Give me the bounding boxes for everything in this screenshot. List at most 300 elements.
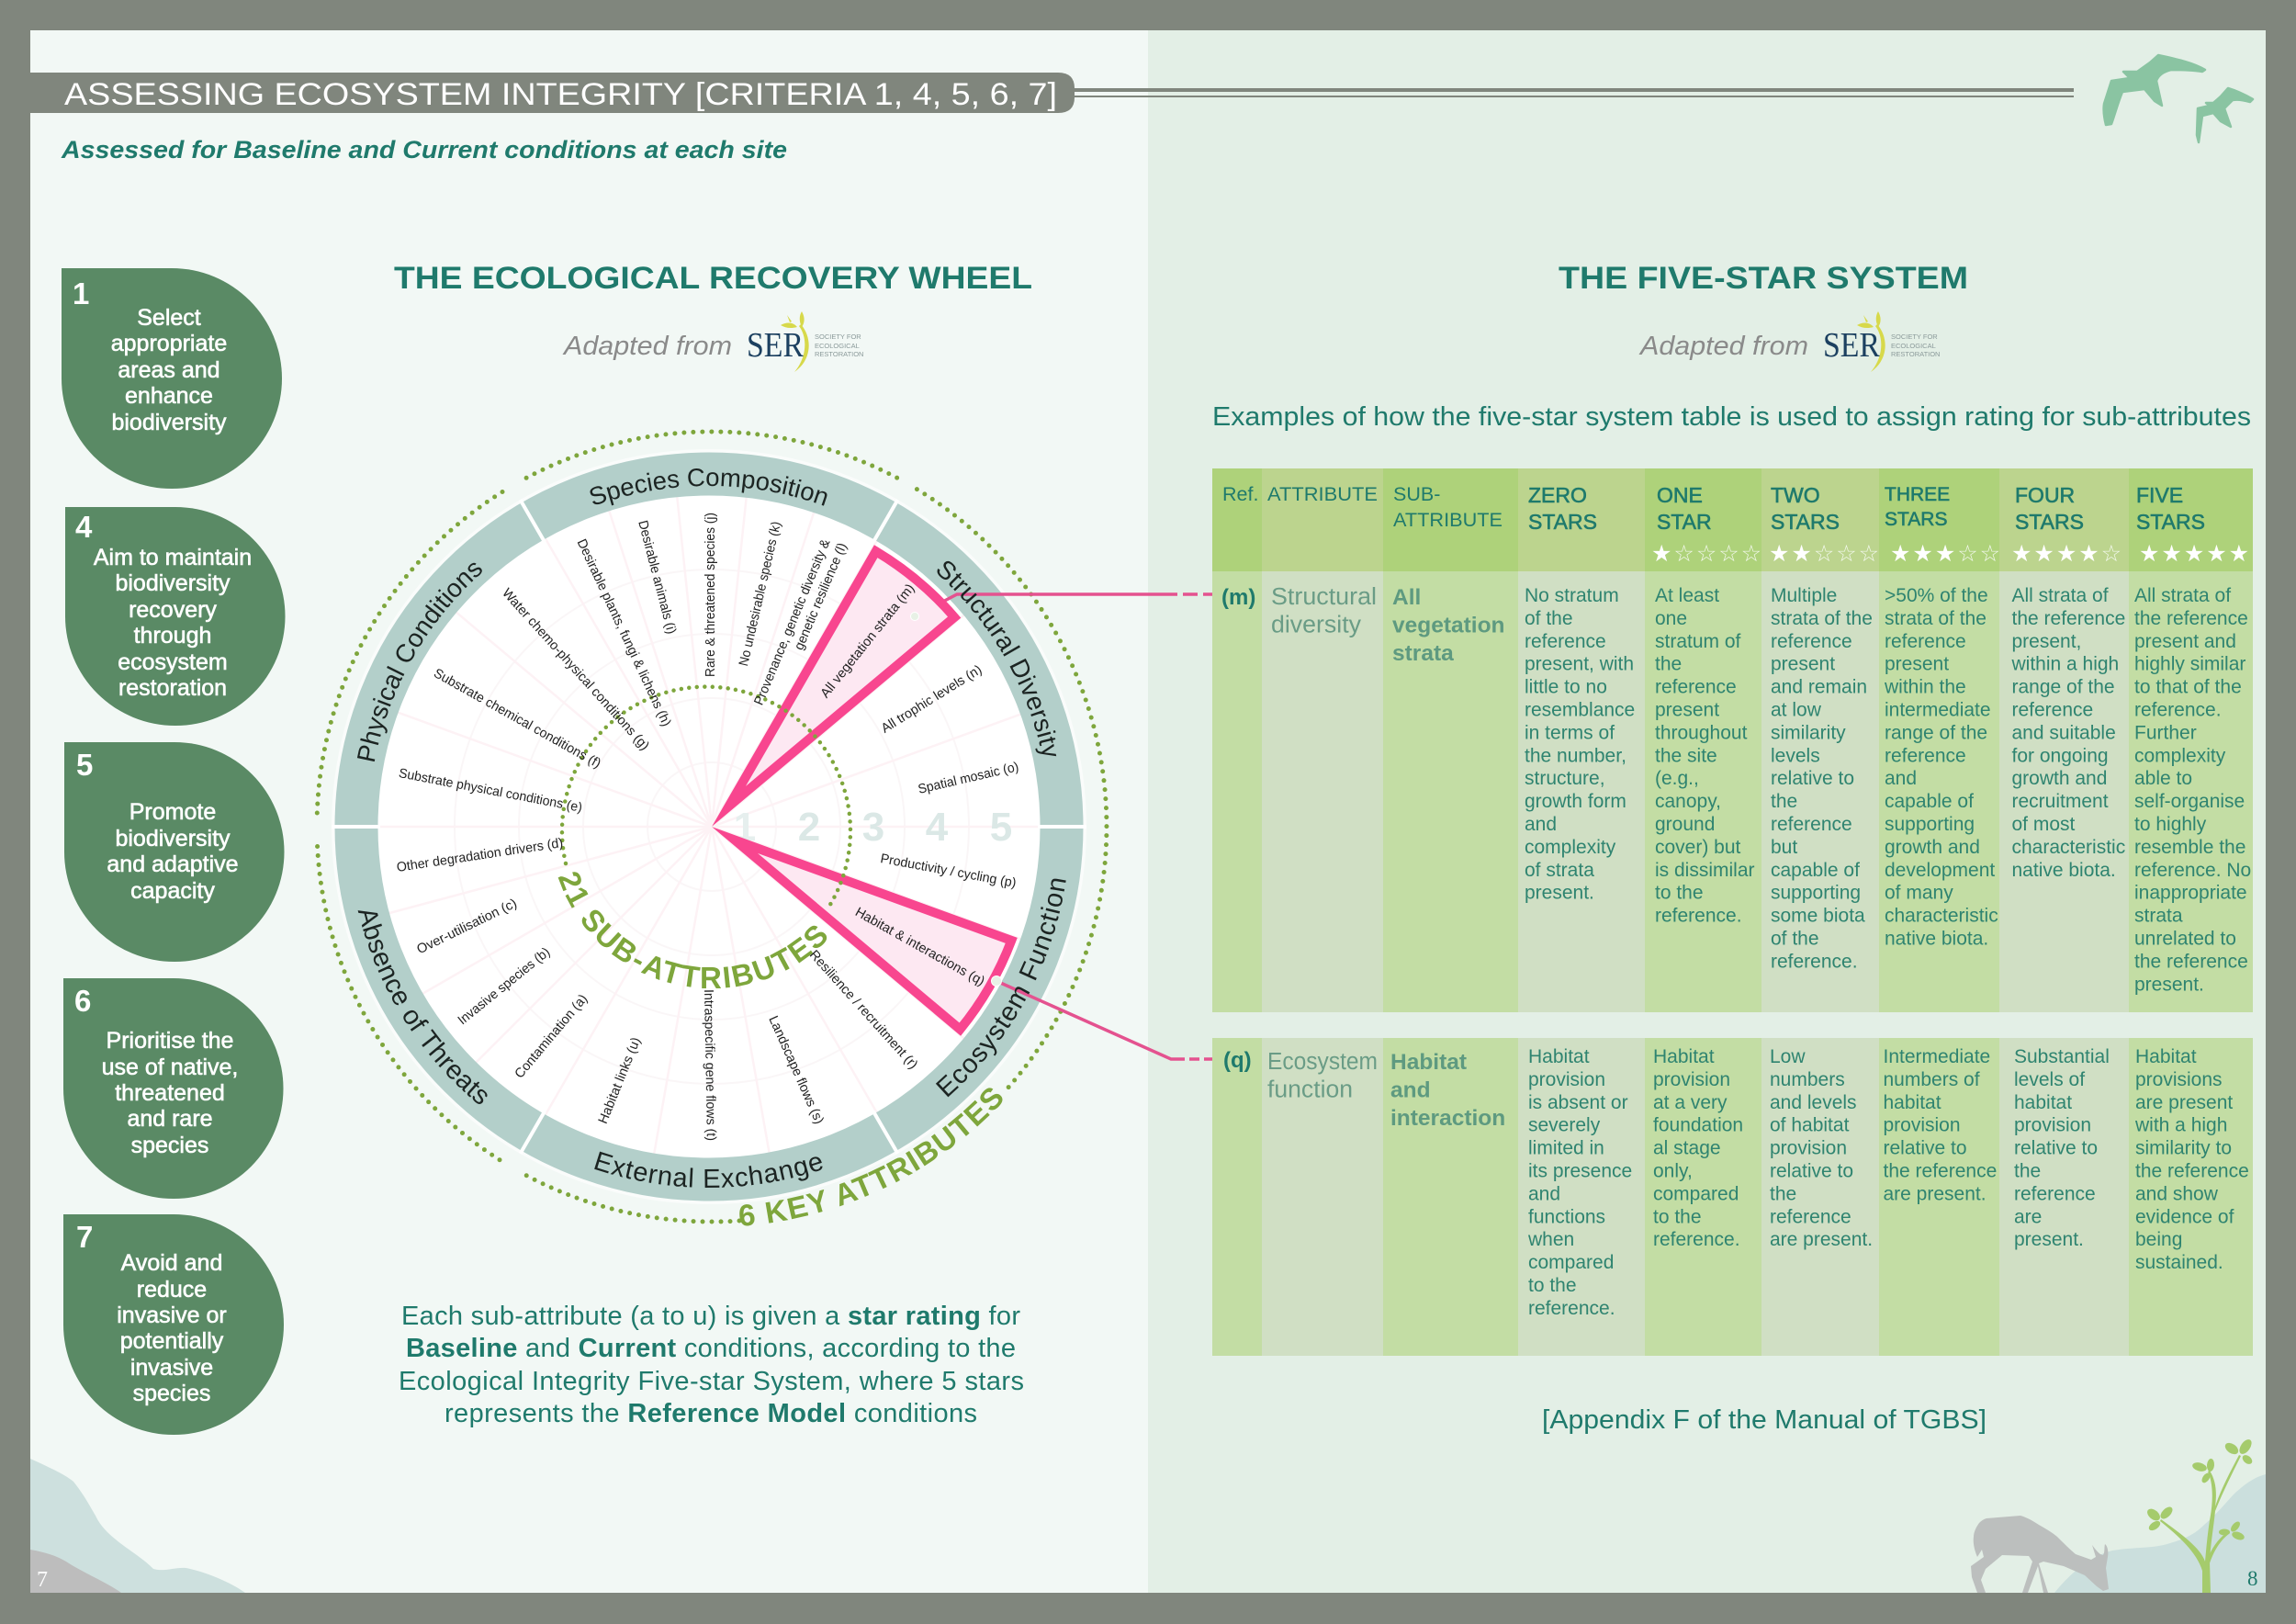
row m: two stars: strata of the [1771, 608, 1873, 629]
row m: three stars: growth and [1885, 837, 1980, 858]
sub-attribute labels: Contamination (a) [512, 992, 591, 1081]
row q: labels: and [1390, 1078, 1431, 1102]
row m: five stars: highly similar [2134, 654, 2245, 675]
row m: one star: (e.g., [1655, 768, 1699, 789]
row m: three stars: capable of [1885, 791, 1974, 812]
row q: five stars: with a high [2134, 1115, 2227, 1136]
row m: five stars: complexity [2134, 745, 2226, 766]
row q: labels: Habitat [1390, 1050, 1467, 1075]
table header labels: ATTRIBUTE [1267, 483, 1378, 505]
row q: two stars: numbers [1770, 1069, 1845, 1090]
heading: five-star system: THE FIVE-STAR SYSTEM [1559, 261, 1968, 296]
pill 7: reduce [137, 1277, 207, 1303]
row q: five stars: similarity to [2135, 1138, 2232, 1159]
scale numbers 1 to 5: 2 [798, 805, 820, 850]
row m: labels: All [1392, 585, 1421, 610]
row m: two stars: reference [1771, 814, 1852, 835]
row m: four stars: of most [2011, 814, 2076, 835]
row q: one star: al stage [1653, 1138, 1721, 1159]
row m: zero stars: No stratum [1525, 585, 1619, 606]
icon: flying birds [2104, 55, 2253, 142]
sub-attribute labels: Desirable plants, fungi & lichens (h) [574, 537, 673, 728]
row q: three stars: provision [1883, 1115, 1961, 1136]
row m: zero stars: in terms of [1525, 722, 1615, 743]
row background: m [1212, 571, 2253, 1012]
table header labels: Ref. [1222, 483, 1258, 505]
sub-attribute labels: Other degradation drivers (d) [396, 836, 564, 875]
row q: two stars: are present. [1770, 1229, 1873, 1250]
adapted from SER logo (left): Adapted from [562, 332, 732, 361]
row m: zero stars: growth form [1525, 791, 1626, 812]
row m: three stars: supporting [1885, 814, 1975, 835]
row m: three stars: native biota. [1885, 928, 1988, 950]
row m: zero stars: of strata [1525, 860, 1594, 881]
row q: one star: only, [1653, 1161, 1693, 1181]
decoration: left bottom hills [30, 1459, 245, 1593]
row m: one star: stratum of [1655, 631, 1741, 652]
pill 6: Prioritise the [107, 1028, 233, 1054]
row m: two stars: but [1771, 837, 1797, 858]
row m: four stars: growth and [2011, 768, 2107, 789]
sub-attribute labels: No undesirable species (k) [737, 520, 784, 668]
row q: zero stars: is absent or [1528, 1092, 1628, 1113]
row m: two stars: relative to [1771, 768, 1854, 789]
adapted from SER logo (left): RESTORATION [815, 350, 863, 358]
wheel explanation text [399, 1302, 1024, 1428]
row q: two stars: relative to [1770, 1161, 1853, 1181]
row q: two stars: reference [1770, 1206, 1851, 1227]
adapted from SER logo (left): SER [747, 326, 805, 365]
pill 7: invasive or [117, 1303, 227, 1328]
row m: zero stars: complexity [1525, 837, 1616, 858]
row m: one star: cover) but [1655, 837, 1741, 858]
row q: two stars: provision [1770, 1138, 1847, 1159]
panel: right page [1148, 30, 2266, 1593]
row m: zero stars: present, with [1525, 654, 1634, 675]
row q: one star: at a very [1653, 1092, 1728, 1113]
row m: one star: throughout [1655, 722, 1748, 743]
row m: zero stars: resemblance [1525, 700, 1635, 720]
white disk [332, 449, 1086, 1204]
row q: zero stars: when [1527, 1229, 1574, 1250]
row m: three stars: range of the [1885, 722, 1987, 743]
highlighted wedge: all vegetation strata [729, 551, 954, 806]
table header labels: ATTRIBUTE [1393, 509, 1503, 531]
attribute labels on ring: Absence of Threats [358, 910, 487, 1104]
row m: three stars: within the [1884, 677, 1966, 698]
row m: two stars: at low [1771, 700, 1822, 720]
pill 7 [63, 1214, 284, 1435]
row q: five stars: the reference [2135, 1161, 2249, 1181]
row m: three stars: strata of the [1885, 608, 1986, 629]
adapted from SER logo (right): RESTORATION [1891, 350, 1940, 358]
pill 6: and rare [127, 1106, 213, 1132]
label: 21 sub-attributes: 21 SUB-ATTRIBUTES [558, 872, 827, 988]
row m: labels [1221, 584, 1505, 666]
row m: two stars: reference [1771, 631, 1852, 652]
row background: q [1212, 1038, 2253, 1356]
pill 1: appropriate [111, 331, 227, 356]
table header labels [1222, 483, 2205, 534]
row m: five stars: reference. [2134, 700, 2222, 720]
row m: three stars: >50% of the [1885, 585, 1988, 606]
table header labels: STARS [1771, 510, 1840, 534]
row m: two stars: capable of [1771, 860, 1860, 881]
attribute labels on ring: Species Composition [590, 468, 827, 506]
scale numbers 1 to 5: 1 [734, 805, 756, 850]
row q: three stars: relative to [1883, 1138, 1967, 1159]
row m: two stars: some biota [1771, 906, 1865, 927]
connector dots [911, 612, 1001, 987]
row m: three stars: development [1885, 860, 1995, 881]
row q: zero stars: severely [1528, 1115, 1601, 1136]
pill 6: use of native, [102, 1054, 238, 1080]
pill 5: and adaptive [107, 851, 239, 877]
pill 5 [64, 742, 285, 962]
row q: labels: function [1267, 1077, 1353, 1102]
row m: four stars: within a high [2011, 654, 2119, 675]
row m: three stars: and [1885, 768, 1917, 789]
row m: five stars: to highly [2134, 814, 2207, 835]
row q: five stars: are present [2135, 1092, 2233, 1113]
row q: labels: Ecosystem [1267, 1049, 1378, 1075]
pill 5: capacity [130, 878, 215, 904]
table header labels: STAR [1657, 510, 1712, 534]
row q: zero stars: provision [1528, 1069, 1605, 1090]
row m: five stars: the reference [2134, 951, 2248, 972]
pill 4: 4 [75, 510, 93, 544]
sub-attribute labels: All trophic levels (n) [879, 662, 985, 737]
pill 5: 5 [76, 748, 93, 782]
pill 4: biodiversity [115, 570, 231, 596]
row q: two stars: the [1770, 1183, 1796, 1204]
row q: three stars: the reference [1883, 1161, 1997, 1181]
adapted from SER logo (right) [1638, 311, 1940, 372]
row q: labels: (q) [1223, 1048, 1252, 1073]
row m: two stars: levels [1771, 745, 1820, 766]
wheel explanation text: represents the Reference Model conditions [445, 1399, 977, 1428]
scale numbers 1 to 5 [734, 805, 1012, 850]
row m: five stars: reference. No [2134, 860, 2251, 881]
wheel explanation text: Each sub-attribute (a to u) is given a star rating for [401, 1302, 1020, 1331]
pill 4 [65, 507, 285, 726]
row m: labels: Structural [1271, 584, 1377, 610]
row m: three stars: reference [1885, 631, 1966, 652]
row q: zero stars: functions [1528, 1206, 1605, 1227]
attribute labels on ring [357, 468, 1066, 1188]
sub-attribute labels: Rare & threatened species (j) [703, 513, 718, 677]
row m: five stars: resemble the [2134, 837, 2245, 858]
row m: two stars: present [1771, 654, 1835, 675]
row q: four stars: reference [2014, 1183, 2096, 1204]
pill 7: potentially [120, 1328, 224, 1354]
row q: zero stars: and [1528, 1183, 1560, 1204]
row m: one star: At least [1655, 585, 1719, 606]
sub-attribute labels: Substrate chemical conditions (f) [431, 666, 603, 772]
row m: two stars: of the [1771, 928, 1819, 950]
page number 8: 8 [2247, 1567, 2257, 1590]
row m: five stars: present and [2134, 631, 2236, 652]
star ratings: ★☆☆☆☆ [1651, 540, 1763, 567]
icon: grazing deer [1971, 1516, 2109, 1593]
row q: one star: provision [1653, 1069, 1730, 1090]
row q: one star: Habitat [1653, 1046, 1715, 1067]
pill 4: Aim to maintain [94, 545, 252, 570]
pill 6: species [131, 1133, 208, 1158]
row m: zero stars: present. [1525, 883, 1594, 904]
attribute labels on ring: Physical Conditions [357, 562, 482, 762]
page number 7: 7 [37, 1568, 48, 1592]
row q: four stars: habitat [2014, 1092, 2072, 1113]
row q: five stars: being [2135, 1229, 2182, 1250]
pill 6 [63, 978, 283, 1199]
star ratings: ★★★★☆ [2011, 540, 2123, 567]
sub-attribute labels: Productivity / cycling (p) [879, 851, 1018, 891]
row q: zero stars: its presence [1528, 1161, 1632, 1181]
sub-attribute labels: Provenance, genetic diversity & [751, 537, 834, 707]
row m: two stars: supporting [1771, 883, 1861, 904]
row m: four stars: range of the [2011, 677, 2115, 698]
scale numbers 1 to 5: 5 [990, 805, 1012, 850]
row m: four stars: present, [2011, 631, 2081, 652]
row m: four stars: recruitment [2011, 791, 2109, 812]
row q: three stars: numbers of [1883, 1069, 1980, 1090]
row m: one star: the site [1655, 745, 1717, 766]
sub-attribute labels: Over-utilisation (c) [415, 897, 519, 957]
table header labels: STARS [1885, 509, 1947, 530]
row m: four stars: the reference [2011, 608, 2125, 629]
row q: four stars: levels of [2014, 1069, 2085, 1090]
row m: five stars: able to [2134, 768, 2192, 789]
row q: one star: to the [1653, 1206, 1702, 1227]
row q: zero stars: Habitat [1528, 1046, 1590, 1067]
row m: three stars: reference [1885, 745, 1966, 766]
row m: five stars: inappropriate [2134, 883, 2247, 904]
pill 7: Avoid and [121, 1250, 222, 1276]
row m: five stars: to that of the [2134, 677, 2242, 698]
table header labels: STARS [2136, 510, 2205, 534]
label: 6 key attributes: 6 KEY ATTRIBUTES [739, 1088, 1003, 1225]
sub-attribute labels: Resilience / recruitment (r) [806, 948, 920, 1072]
row q: zero stars: to the [1528, 1275, 1577, 1296]
row m: three stars: intermediate [1885, 700, 1991, 720]
row q: two stars: of habitat [1770, 1115, 1850, 1136]
row m: zero stars: the number, [1525, 745, 1626, 766]
sub-attribute labels: Intraspecific gene flows (t) [701, 989, 718, 1141]
row q: five stars: provisions [2135, 1069, 2223, 1090]
adapted from SER logo (left): ECOLOGICAL [815, 342, 860, 350]
adapted from SER logo (right): ECOLOGICAL [1891, 342, 1936, 350]
row m: two stars: the [1771, 791, 1797, 812]
row m: one star: reference [1655, 677, 1737, 698]
table header labels: ONE [1657, 483, 1703, 507]
row m: one star: ground [1655, 814, 1715, 835]
table intro text: Examples of how the five-star system table is used to assign rating for sub-attributes [1212, 402, 2251, 432]
row m: four stars: and suitable [2011, 722, 2116, 743]
attribute labels on ring: Structural Diversity [937, 560, 1056, 757]
row m: labels: strata [1392, 641, 1454, 666]
sub-attribute labels: Desirable animals (i) [635, 519, 679, 636]
row m: zero stars: little to no [1525, 677, 1607, 698]
row m: five stars: present. [2134, 974, 2204, 995]
table header labels: ZERO [1528, 483, 1587, 507]
scale numbers 1 to 5: 3 [862, 805, 884, 850]
row m: two stars: and remain [1771, 677, 1867, 698]
table header background [1212, 468, 2253, 571]
row q: five stars: evidence of [2135, 1206, 2234, 1227]
row q: four stars: provision [2014, 1115, 2091, 1136]
attribute labels on ring: External Exchange [594, 1152, 823, 1188]
criteria pills [62, 268, 285, 1435]
star ratings: ★★★★★ [2139, 540, 2251, 567]
row m: five stars: Further [2134, 722, 2197, 743]
row m: five stars: self-organise [2134, 791, 2245, 812]
sub-attribute labels: Landscape flows (s) [765, 1014, 827, 1126]
row m: zero stars: and [1525, 814, 1557, 835]
attribute ring [356, 474, 1062, 1179]
star ratings: ★★★☆☆ [1890, 540, 2002, 567]
title banner [30, 73, 2074, 113]
row q: four stars: are [2014, 1206, 2042, 1227]
row m: four stars: reference [2011, 700, 2093, 720]
sub-attribute labels: Spatial mosaic (o) [917, 760, 1020, 797]
panel: left page [30, 30, 1148, 1593]
star ratings [1651, 540, 2251, 567]
row m: two stars: reference. [1771, 951, 1858, 972]
pill 1: Select [137, 305, 201, 331]
row m: one star: to the [1655, 883, 1704, 904]
pill 6: threatened [115, 1080, 225, 1106]
row q: zero stars: compared [1528, 1252, 1614, 1273]
heading: ecological recovery wheel: THE ECOLOGICAL RECOVERY WHEEL [394, 261, 1032, 296]
row m: labels: vegetation [1392, 614, 1505, 637]
adapted from SER logo (left): SOCIETY FOR [815, 333, 861, 341]
row q: zero stars: limited in [1528, 1138, 1604, 1159]
row m: one star: canopy, [1655, 791, 1721, 812]
highlighted wedge: habitat and interactions [735, 840, 1011, 1030]
pill 7: 7 [76, 1220, 93, 1254]
pill 1: areas and [118, 357, 220, 383]
row m: zero stars: reference [1525, 631, 1606, 652]
row m: four stars: for ongoing [2011, 745, 2109, 766]
row m: four stars: native biota. [2011, 860, 2116, 881]
row q: one star: compared [1653, 1183, 1739, 1204]
pill 4: recovery [129, 597, 217, 623]
row m: two stars: similarity [1771, 722, 1846, 743]
table header labels: FIVE [2136, 483, 2183, 507]
row q: four stars: the [2014, 1161, 2041, 1181]
row m: three stars: characteristic [1885, 906, 1998, 927]
five-star table [1212, 468, 2253, 1356]
row m: zero stars: structure, [1525, 768, 1605, 789]
wheel explanation text: Ecological Integrity Five-star System, where 5 stars [399, 1367, 1024, 1396]
row m: labels: diversity [1271, 612, 1361, 637]
pill 7: species [133, 1381, 210, 1406]
row q: one star: foundation [1653, 1115, 1743, 1136]
adapted from SER logo (right): Adapted from [1638, 332, 1808, 361]
pill 1: 1 [73, 276, 89, 310]
row m: three stars: present [1885, 654, 1949, 675]
decoration: right bottom hill [2054, 1474, 2266, 1593]
table header labels: FOUR [2015, 483, 2075, 507]
row q: labels: interaction [1390, 1106, 1505, 1131]
row q: five stars: and show [2135, 1183, 2219, 1204]
row m: one star: the [1655, 654, 1682, 675]
inner dotted arc [562, 687, 850, 908]
row q: three stars: are present. [1883, 1183, 1986, 1204]
adapted from SER logo (right): SOCIETY FOR [1891, 333, 1938, 341]
row q: three stars: habitat [1883, 1092, 1941, 1113]
row m: three stars: of many [1885, 883, 1953, 904]
row q: four stars: present. [2014, 1229, 2084, 1250]
table header labels: STARS [1528, 510, 1597, 534]
row m: one star: is dissimilar [1655, 860, 1755, 881]
pill 7: invasive [130, 1355, 213, 1381]
title banner: ASSESSING ECOSYSTEM INTEGRITY [CRITERIA 1, 4, 5, 6, 7] [64, 77, 1057, 112]
row m: one star: present [1655, 700, 1719, 720]
pill 5: biodiversity [115, 826, 231, 851]
adapted from SER logo (left) [562, 311, 863, 372]
row q: five stars: sustained. [2135, 1252, 2223, 1273]
table header labels: THREE [1885, 484, 1950, 505]
pill 1 [62, 268, 282, 489]
adapted from SER logo (right): SER [1823, 326, 1881, 365]
subtitle: Assessed for Baseline and Current conditions at each site [61, 136, 787, 164]
sub-attribute labels: Habitat & interactions (q) [852, 905, 987, 989]
row q: one star: reference. [1653, 1229, 1740, 1250]
sub-attribute labels: genetic resilience (l) [792, 541, 850, 652]
pill 4: restoration [118, 675, 227, 701]
row m: four stars: All strata of [2011, 585, 2109, 606]
sub-attribute labels: Invasive species (b) [456, 945, 553, 1028]
row m: four stars: characteristic [2011, 837, 2125, 858]
outer dotted ring [317, 432, 1107, 1222]
sub-attribute labels: Habitat links (u) [596, 1035, 644, 1126]
pill 4: through [134, 623, 211, 648]
row q: labels [1223, 1048, 1505, 1131]
table header labels: SUB- [1393, 483, 1440, 505]
pill 1: enhance [125, 383, 213, 409]
row q: five stars: Habitat [2135, 1046, 2197, 1067]
row m: five stars: All strata of [2134, 585, 2231, 606]
row m: one star: reference. [1655, 906, 1742, 927]
pill 1: biodiversity [111, 410, 227, 435]
row m: two stars: Multiple [1771, 585, 1837, 606]
row q: two stars: Low [1770, 1046, 1806, 1067]
pill 5: Promote [129, 799, 216, 825]
pill 4: ecosystem [118, 649, 228, 675]
pill 6: 6 [74, 984, 91, 1018]
row q: four stars: Substantial [2014, 1046, 2110, 1067]
attribute labels on ring: Ecosystem Function [935, 878, 1066, 1097]
ecological recovery wheel [314, 430, 1212, 1225]
row q: zero stars: reference. [1528, 1298, 1615, 1319]
appendix reference: [Appendix F of the Manual of TGBS] [1542, 1405, 1986, 1435]
row m: one star: one [1655, 608, 1687, 629]
scale numbers 1 to 5: 4 [926, 805, 949, 850]
sub-attribute labels: Substrate physical conditions (e) [398, 766, 583, 816]
row m: five stars: the reference [2134, 608, 2248, 629]
connector lines [915, 594, 1215, 1059]
row q: three stars: Intermediate [1883, 1046, 1990, 1067]
sub-attribute labels: All vegetation strata (m) [818, 581, 917, 701]
row q: two stars: and levels [1770, 1092, 1857, 1113]
row m: five stars: unrelated to [2134, 928, 2236, 950]
wheel explanation text: Baseline and Current conditions, according to the [406, 1334, 1016, 1363]
table header labels: TWO [1771, 483, 1820, 507]
star ratings: ★★☆☆☆ [1769, 540, 1881, 567]
sub-attribute labels: Water chemo-physical conditions (g) [499, 586, 652, 753]
